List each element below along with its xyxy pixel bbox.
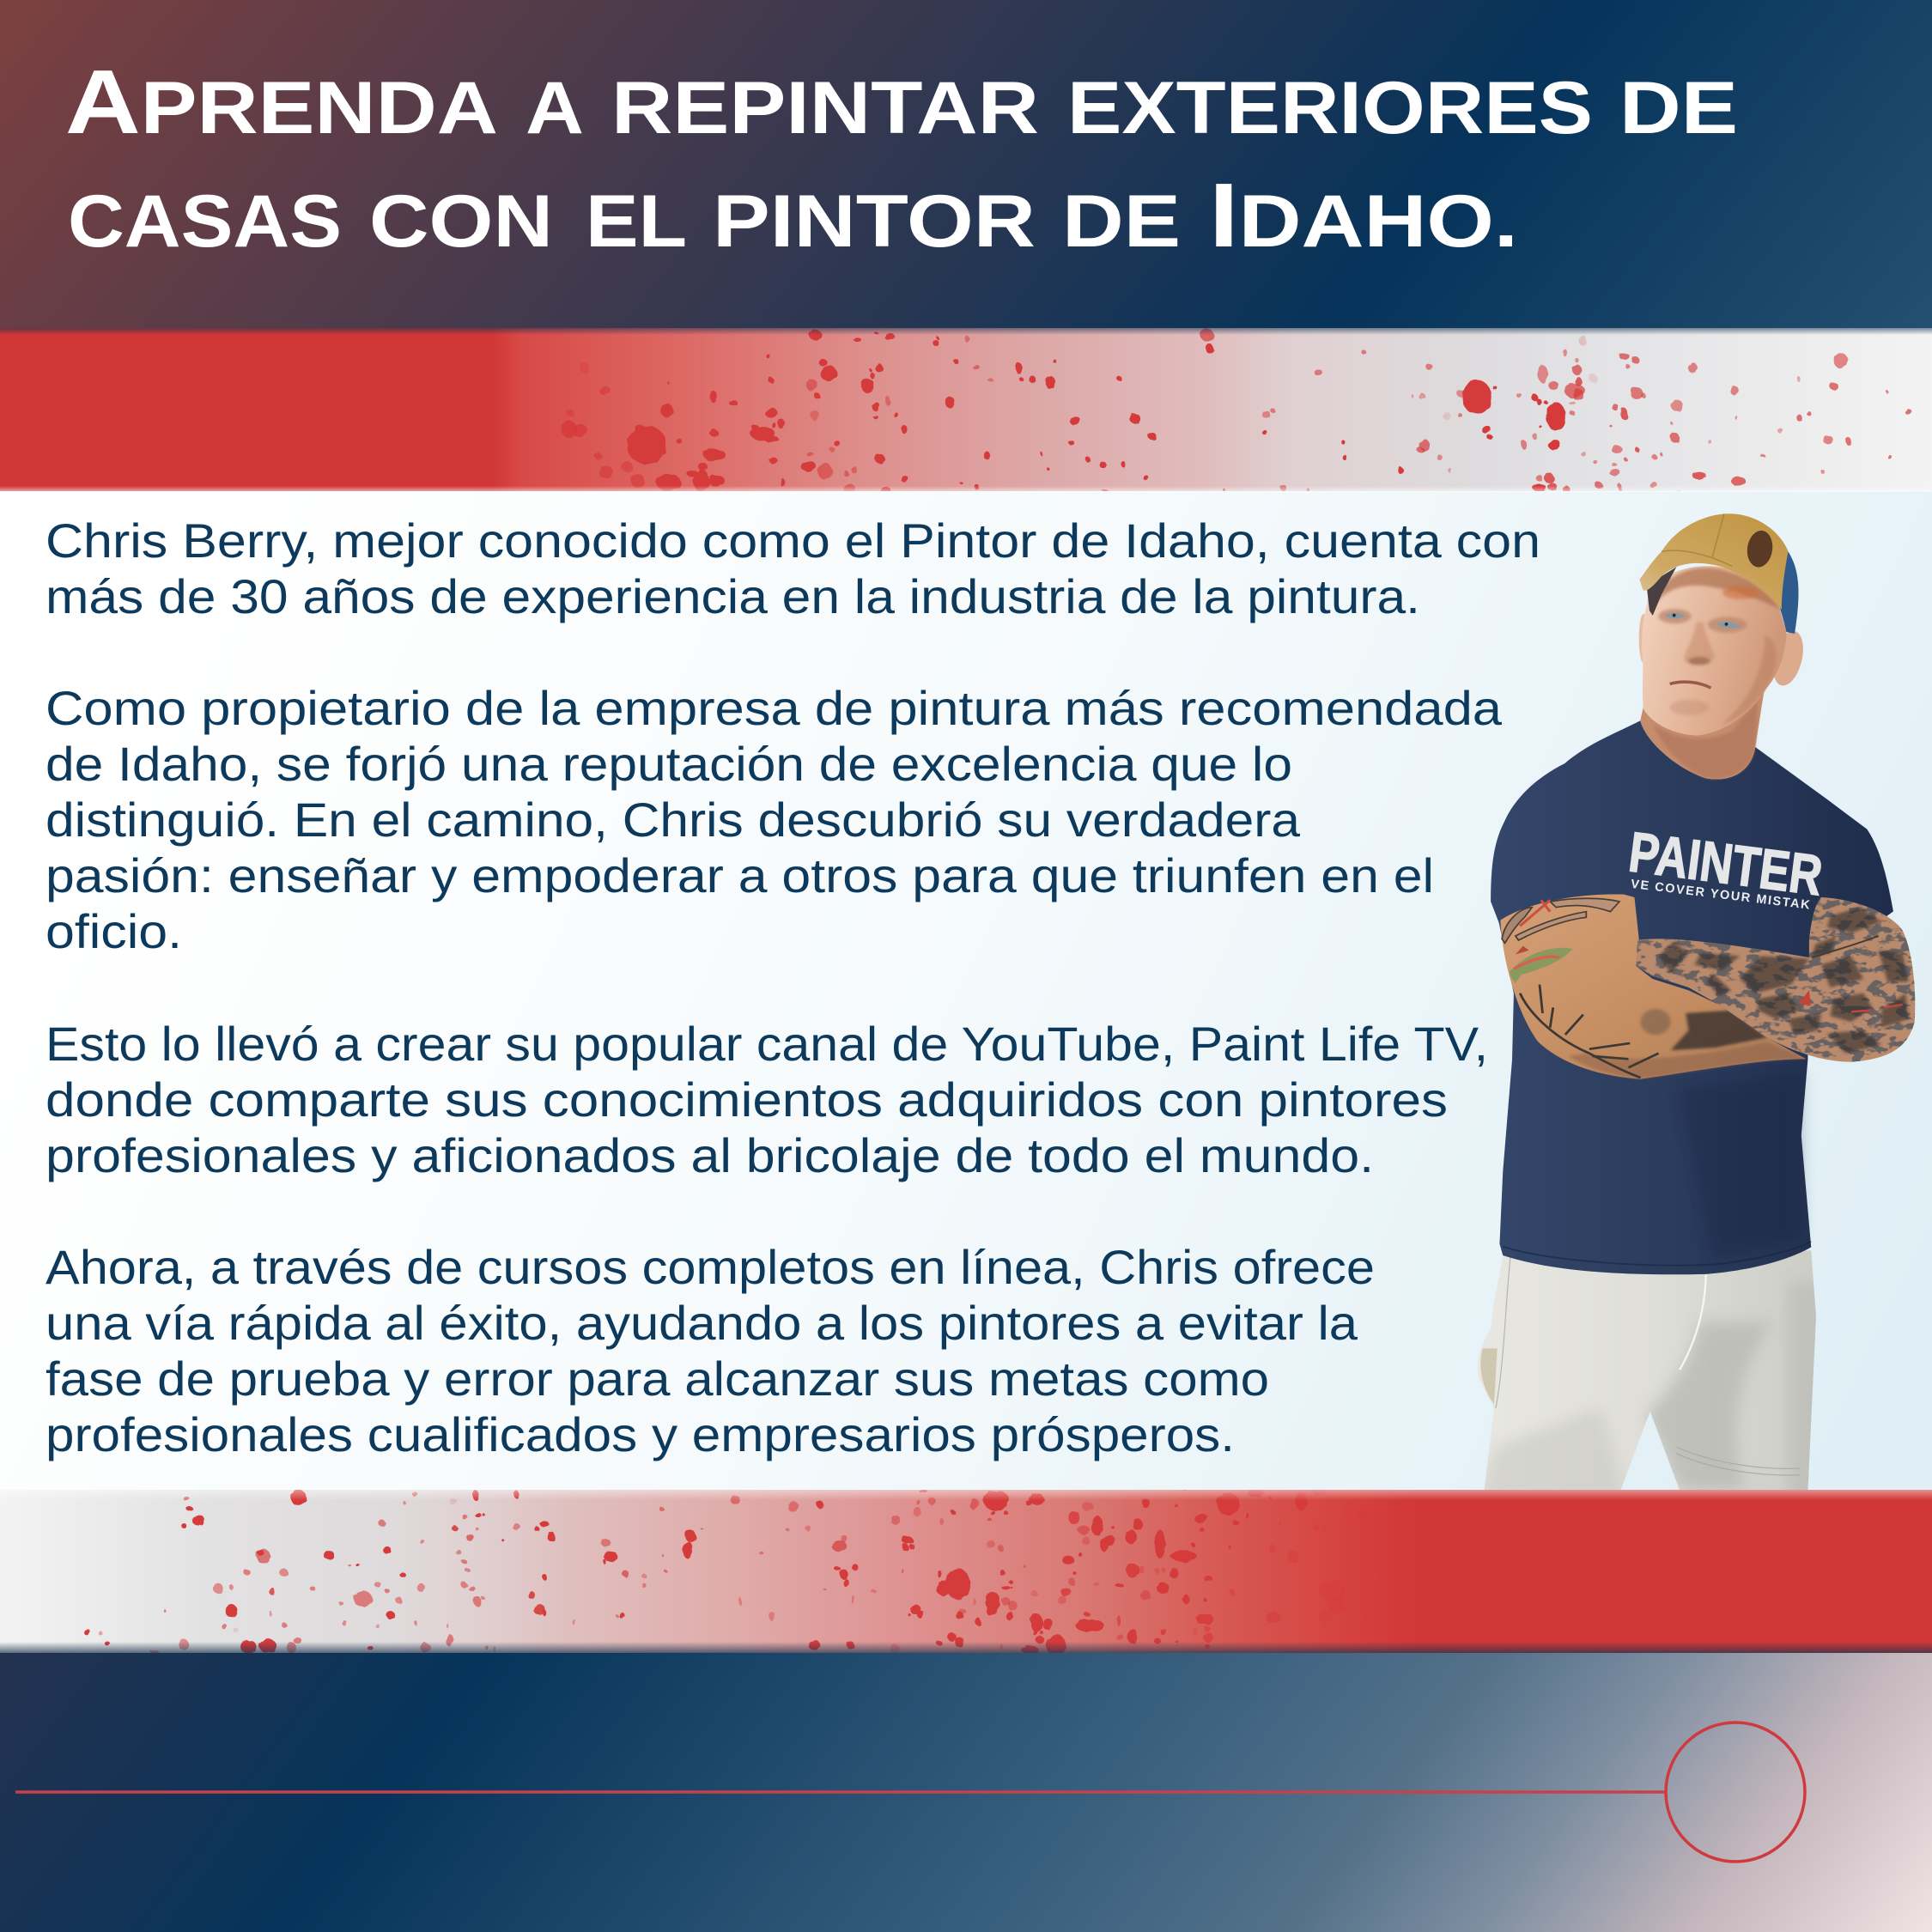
body paragraph 2: Como propietario de la empresa de pintura más recomendada [46,681,1503,735]
head [1639,566,1808,736]
title: CASAS [68,180,342,263]
shirt print: PAINTER: PAINTER [1625,819,1826,907]
body paragraph 3: profesionales y aficionados al bricolaje de todo el mundo. [46,1128,1374,1182]
title [65,52,1738,266]
footer line and circle [15,1722,1805,1862]
body paragraph 4 [46,1240,1375,1461]
paint splatter: lower band [84,1485,1379,1657]
body paragraph 3 [46,1017,1488,1182]
body paragraph 1 [46,513,1540,623]
panel: bottom footer band [0,1653,1932,1932]
body paragraph 2: distinguió. En el camino, Chris descubrió su verdadera [46,793,1301,847]
crossed tattooed arm [1636,897,1915,1062]
panel: upper red paint band [0,328,1932,492]
body paragraph 4: Ahora, a través de cursos completos en línea, Chris ofrece [46,1240,1375,1294]
forearm and upper arm, viewer's left [1500,894,1806,1079]
panel: lower red paint band [0,1490,1932,1653]
title: PINTOR [713,180,1036,263]
body paragraph 1: más de 30 años de experiencia en la industria de la pintura. [46,569,1420,623]
body paragraph 2: pasión: enseñar y empoderar a otros para que triunfen en el [46,848,1434,902]
illustration: Chris Berry, arms crossed [1476,513,1915,1499]
body paragraph 4: una vía rápida al éxito, ayudando a los pintores a evitar la [46,1296,1358,1350]
body paragraph 3: donde comparte sus conocimientos adquiridos con pintores [46,1072,1448,1127]
title: DE [1619,67,1738,149]
title: REPINTAR [611,67,1039,149]
title: APRENDA [65,52,498,153]
paint splatter: upper band [562,329,1912,494]
title: DE [1062,180,1181,263]
title: CON [369,180,553,263]
body paragraph 4: profesionales cualificados y empresarios prósperos. [46,1407,1235,1461]
body paragraph 2: oficio. [46,904,182,958]
body paragraph 2: de Idaho, se forjó una reputación de excelencia que lo [46,737,1292,791]
white work trousers [1476,1250,1831,1499]
title: EL [586,180,687,263]
baseball cap [1639,513,1799,634]
title: IDAHO. [1209,165,1518,266]
body paragraph 2 [46,681,1503,958]
title: EXTERIORES [1067,67,1593,149]
neck [1640,684,1765,780]
shirt print: tagline: VE COVER YOUR MISTAK [1630,878,1811,913]
body paragraph 1: Chris Berry, mejor conocido como el Pintor de Idaho, cuenta con [46,513,1540,568]
body paragraph 3: Esto lo llevó a crear su popular canal de YouTube, Paint Life TV, [46,1017,1488,1071]
body paragraph 4: fase de prueba y error para alcanzar sus metas como [46,1352,1269,1406]
title: A [526,67,584,149]
panel: top header band [0,0,1932,328]
panel: body background [0,491,1932,1491]
navy t-shirt [1491,720,1893,1274]
